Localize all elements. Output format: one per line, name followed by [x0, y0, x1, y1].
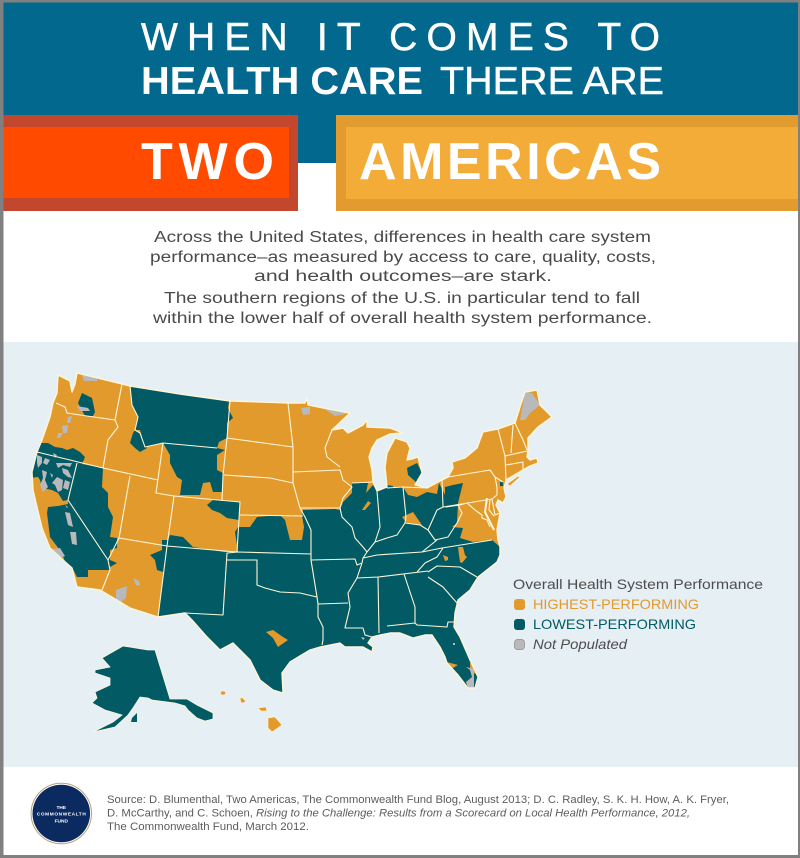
- source text: D. McCarthy, and C. Schoen, Rising to the Challenge: Results from a Scorecard on Local Health Performance, 2012,: [107, 808, 690, 820]
- title line 2: HEALTH CARE: [141, 60, 423, 103]
- state borders: [32, 373, 552, 693]
- map: contiguous US: [31, 372, 552, 694]
- intro text: and health outcomes–are stark.: [254, 268, 552, 285]
- panel: americas: AMERICAS: [359, 133, 661, 191]
- map panel background: [0, 342, 800, 767]
- title line 2: THERE ARE: [440, 60, 664, 103]
- teal county regions: [30, 380, 510, 700]
- legend item: lowest: LOWEST-PERFORMING: [533, 616, 696, 632]
- intro text: within the lower half of overall health system performance.: [152, 310, 652, 327]
- map: Hawaii: [220, 691, 282, 732]
- title line 1: WHEN IT COMES TO: [141, 16, 660, 59]
- map: Long Island: [507, 476, 520, 486]
- intro text: The southern regions of the U.S. in particular tend to fall: [164, 290, 640, 307]
- logo: The Commonwealth Fund: THE: [56, 805, 67, 811]
- map: Alaska: [92, 646, 213, 732]
- intro text: Across the United States, differences in health care system: [154, 229, 651, 246]
- logo: The Commonwealth Fund: [31, 783, 92, 844]
- panel: two: TWO: [141, 133, 274, 191]
- header banner: [0, 0, 800, 163]
- legend item: highest: HIGHEST-PERFORMING: [533, 596, 699, 612]
- intro text: performance–as measured by access to care, quality, costs,: [150, 249, 656, 266]
- title line 2: [141, 60, 664, 103]
- map: Alaska island: [131, 713, 137, 722]
- source text: The Commonwealth Fund, March 2012.: [107, 821, 309, 833]
- source text: Source: D. Blumenthal, Two Americas, The Commonwealth Fund Blog, August 2013; D. C. Radley, S. K. H. How, A. K. Fryer,: [107, 794, 729, 806]
- legend title: Overall Health System Performance: [513, 576, 763, 592]
- logo: The Commonwealth Fund: COMMONWEALTH: [37, 812, 86, 818]
- logo: The Commonwealth Fund: FUND: [55, 818, 68, 824]
- legend item: not populated: Not Populated: [533, 636, 628, 652]
- legend: [513, 576, 763, 652]
- panel: two: [0, 115, 298, 211]
- intro text: [150, 229, 656, 327]
- source text: [107, 794, 729, 833]
- panel: americas: [336, 115, 800, 211]
